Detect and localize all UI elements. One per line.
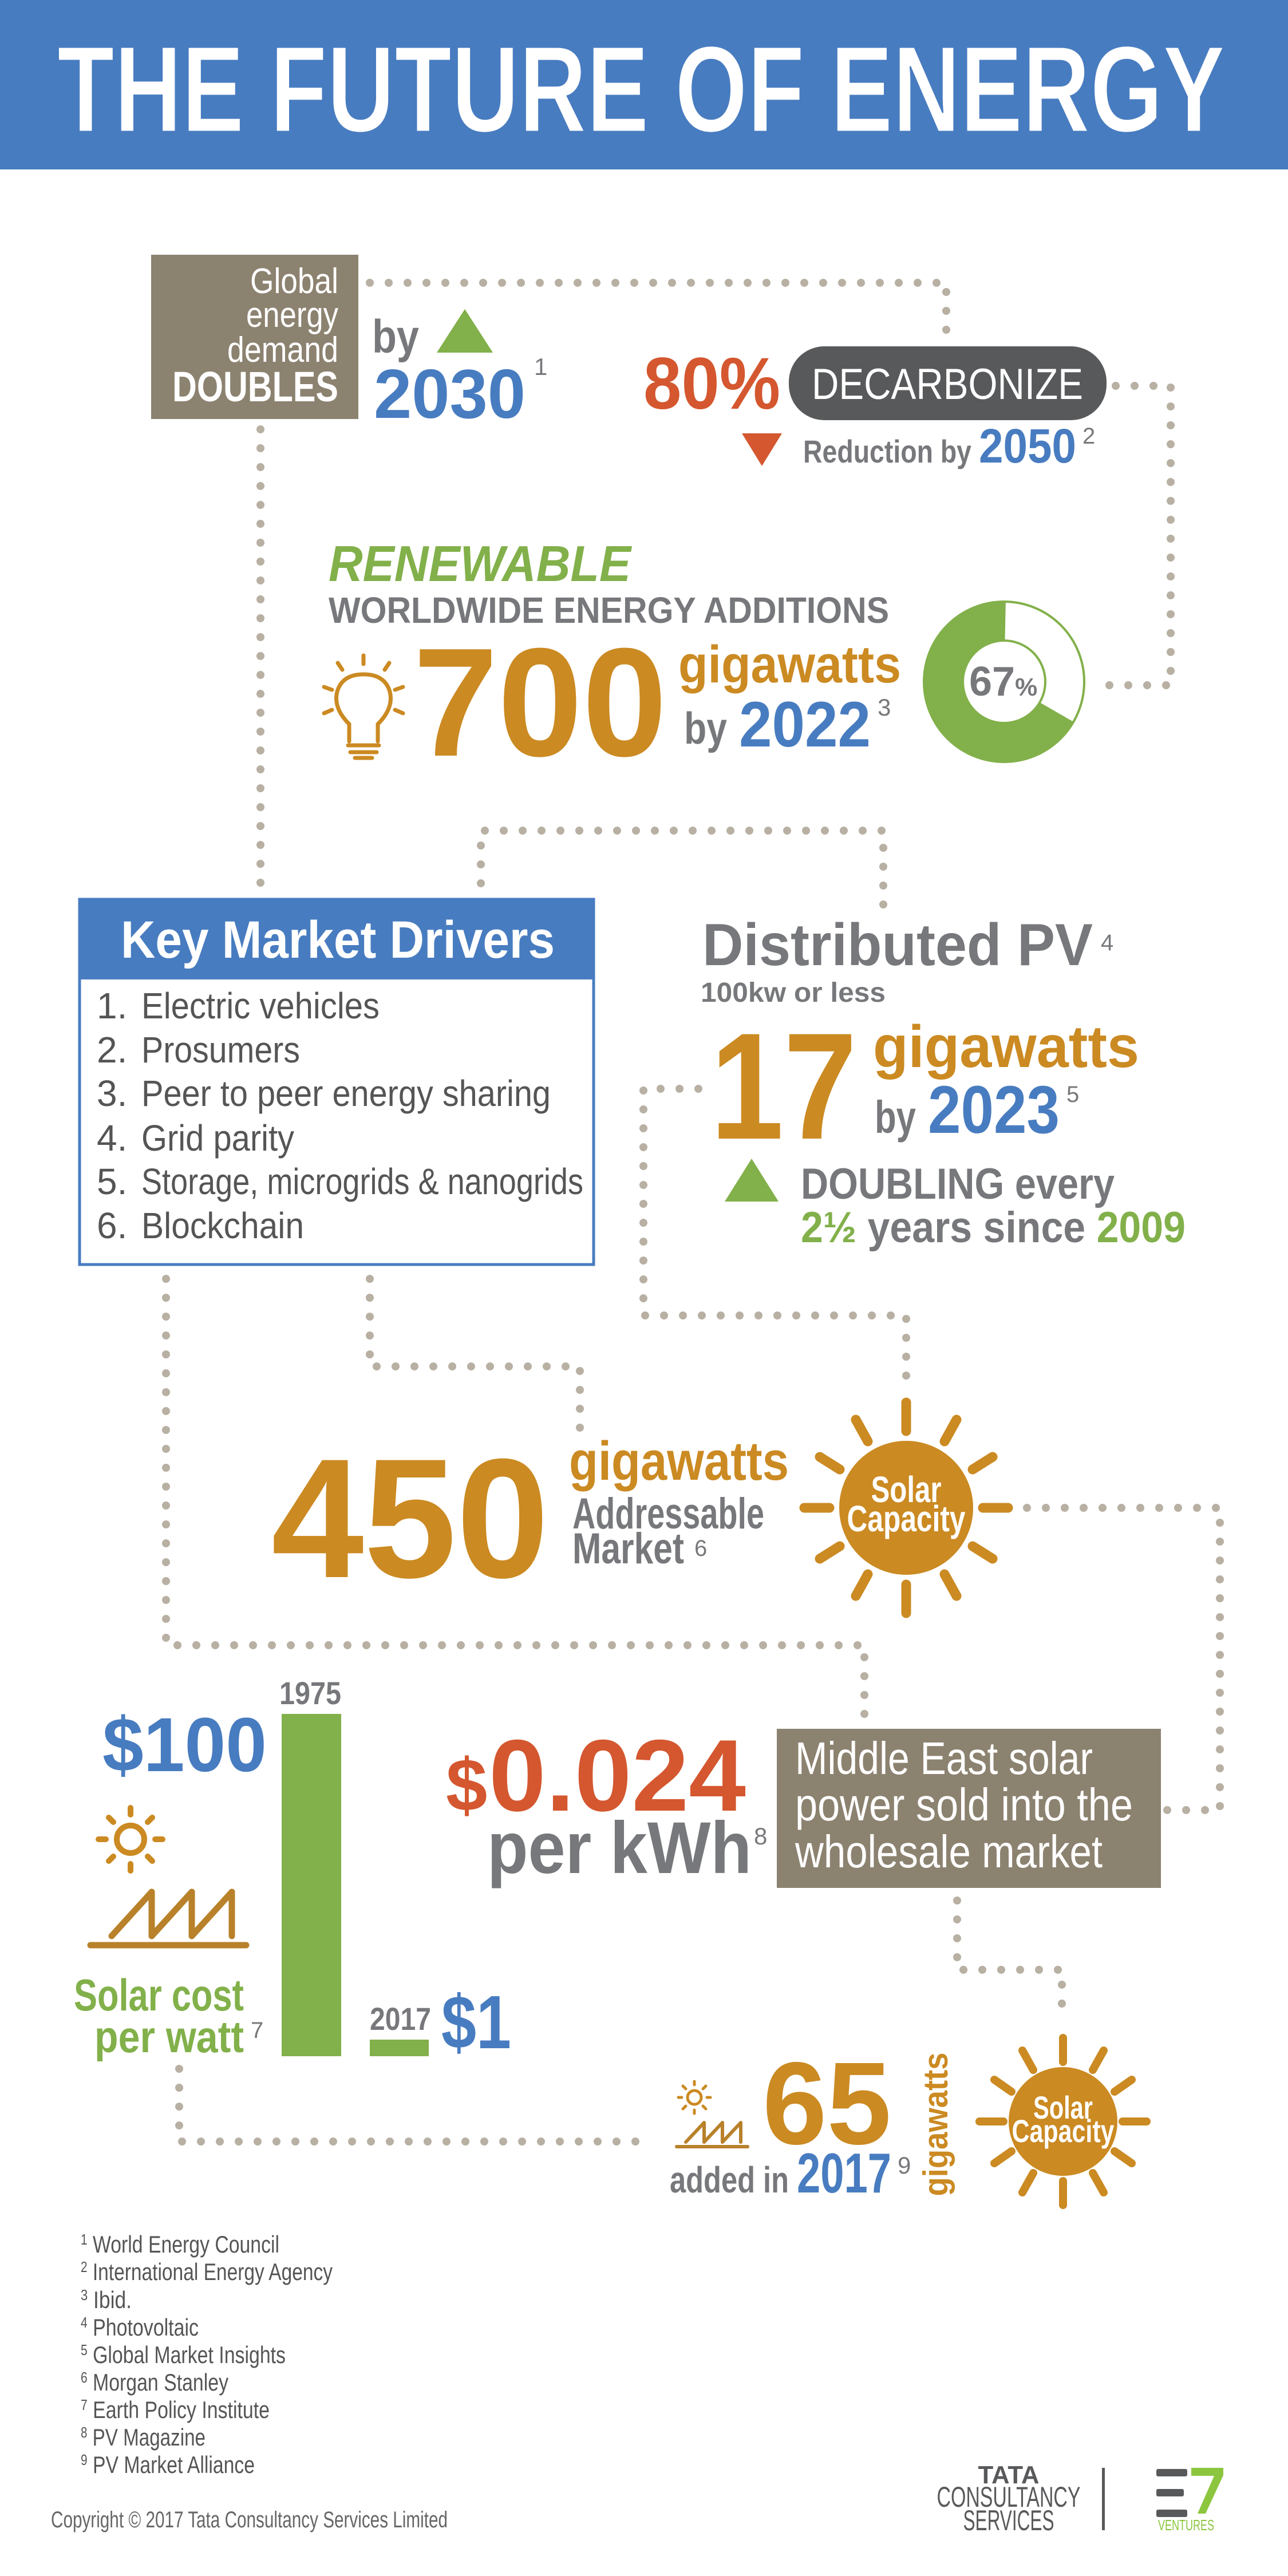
stat: distributed PV: 4 <box>1101 930 1113 955</box>
stat: decarbonize <box>643 343 1107 473</box>
stat: by 2030 <box>372 309 547 433</box>
panel: global energy demand: Global <box>250 262 338 301</box>
dotted connectors <box>166 283 1220 2142</box>
stat: distributed PV: Distributed PV <box>702 912 1093 978</box>
panel: key market drivers: Storage, microgrids & nanogrids <box>141 1161 583 1202</box>
footnotes: 7 <box>81 2396 88 2413</box>
chart: solar cost per watt bars: per watt <box>94 2012 244 2062</box>
logo: TCS <box>937 2461 1105 2537</box>
panel: key market drivers <box>80 899 594 1265</box>
panel: global energy demand <box>151 255 358 419</box>
panel: key market drivers: 5. <box>97 1161 127 1202</box>
panel: key market drivers: Peer to peer energy sharing <box>141 1073 551 1114</box>
stat: $0.024 per kWh: 0.024 <box>489 1718 746 1832</box>
chart: 67% donut <box>921 599 1087 765</box>
stat: decarbonize: 80% <box>643 343 780 425</box>
footnotes: Morgan Stanley <box>88 2369 228 2396</box>
stat: 450 gigawatts <box>271 1423 789 1613</box>
icon: sun solar capacity 1: Capacity <box>847 1498 966 1539</box>
footnotes: Ibid. <box>88 2286 132 2313</box>
stat: distributed PV: 2023 <box>928 1072 1060 1148</box>
stat: distributed PV: 100kw or less <box>701 978 886 1008</box>
stat: distributed PV: 5 <box>1066 1082 1079 1107</box>
footnotes: PV Magazine <box>87 2424 206 2451</box>
logo: E7 ventures: VENTURES <box>1158 2516 1214 2534</box>
logo: E7 ventures <box>1156 2468 1223 2534</box>
stat: distributed PV: gigawatts <box>873 1014 1139 1080</box>
chart: solar cost per watt bars: 1975 <box>279 1675 341 1711</box>
chart: solar cost per watt bars: 7 <box>251 2018 263 2043</box>
footnotes: 9 <box>81 2451 88 2468</box>
icon: small sun 2 <box>678 2081 710 2113</box>
icon: sun solar capacity 1 <box>804 1402 1008 1613</box>
chart: solar cost per watt bars: $100 <box>102 1702 267 1788</box>
stat: 450 gigawatts: Market <box>572 1524 684 1573</box>
footnotes: 1 <box>81 2231 88 2248</box>
panel: key market drivers: Prosumers <box>141 1029 300 1070</box>
chart: solar cost per watt bars <box>74 1675 511 2064</box>
callout: middle east: power sold into the <box>795 1779 1133 1830</box>
stat: 65 gigawatts: 9 <box>898 2152 911 2179</box>
panel: key market drivers: Grid parity <box>141 1117 294 1159</box>
footnotes: 2 <box>81 2258 88 2275</box>
chart: 67% donut: 67% <box>969 659 1037 705</box>
stat: $0.024 per kWh <box>446 1718 767 1889</box>
panel: global energy demand: demand <box>227 330 338 370</box>
footnotes: PV Market Alliance <box>88 2451 255 2478</box>
icon: sun solar capacity 2: Capacity <box>1012 2113 1114 2149</box>
stat: 450 gigawatts: 6 <box>694 1536 707 1561</box>
stat: 700 gigawatts: by <box>684 703 727 753</box>
panel: key market drivers: 6. <box>97 1205 127 1246</box>
stat: by 2030: 2030 <box>374 355 526 433</box>
footnotes: Photovoltaic <box>88 2314 199 2341</box>
chart: solar cost per watt bars: Solar cost <box>74 1970 244 2020</box>
stat: 65 gigawatts <box>670 2038 955 2204</box>
stat: 450 gigawatts: 450 <box>271 1423 549 1613</box>
logo: TCS: SERVICES <box>963 2504 1054 2537</box>
stat: 65 gigawatts: 65 <box>762 2038 891 2169</box>
stat: distributed PV: 2½ years since 2009 <box>801 1203 1186 1252</box>
stat: $0.024 per kWh: 8 <box>754 1823 767 1850</box>
icon: small solar panels <box>677 2123 748 2147</box>
stat: distributed PV: 17 <box>710 1002 857 1171</box>
renewable heading <box>329 535 889 631</box>
stat: 65 gigawatts: gigawatts <box>916 2053 955 2196</box>
stat: decarbonize: 2050 <box>979 419 1076 473</box>
stat: distributed PV: by <box>875 1092 916 1143</box>
icon: light bulb <box>324 655 403 758</box>
panel: key market drivers: 3. <box>97 1073 127 1114</box>
stat: 450 gigawatts: gigawatts <box>569 1431 789 1492</box>
renewable heading: WORLDWIDE ENERGY ADDITIONS <box>329 590 889 631</box>
chart: solar cost per watt bars: 2017 <box>370 2001 431 2037</box>
panel: key market drivers: Electric vehicles <box>141 985 380 1026</box>
panel: key market drivers: Blockchain <box>141 1205 304 1246</box>
panel: key market drivers: Key Market Drivers <box>121 911 555 969</box>
stat: 65 gigawatts: added in <box>670 2159 789 2200</box>
stat: by 2030: by <box>372 311 419 363</box>
icon: small sun <box>98 1808 163 1871</box>
icon: sun solar capacity 2: Solar <box>1033 2089 1093 2125</box>
stat: 65 gigawatts: 2017 <box>797 2142 891 2204</box>
callout: middle east: Middle East solar <box>795 1733 1093 1784</box>
stat: $0.024 per kWh: $ <box>446 1743 487 1827</box>
stat: 700 gigawatts <box>413 617 901 789</box>
renewable heading: RENEWABLE <box>329 535 632 592</box>
stat: 700 gigawatts: 2022 <box>739 689 871 760</box>
stat: distributed PV <box>701 912 1186 1252</box>
chart: solar cost per watt bars: $1 <box>441 1980 511 2064</box>
icon: sun solar capacity 1: Solar <box>871 1469 941 1510</box>
footnotes: Global Market Insights <box>88 2341 286 2368</box>
footnotes: 4 <box>81 2314 88 2331</box>
stat: 700 gigawatts: gigawatts <box>678 635 901 694</box>
panel: global energy demand: energy <box>246 295 338 335</box>
stat: decarbonize: DECARBONIZE <box>812 360 1083 409</box>
stat: 700 gigawatts: 700 <box>413 617 667 789</box>
stat: distributed PV: DOUBLING every <box>801 1160 1115 1208</box>
callout: middle east <box>777 1729 1161 1888</box>
footnotes: 6 <box>81 2369 88 2386</box>
stat: decarbonize: Reduction by <box>803 433 971 469</box>
footnotes: World Energy Council <box>88 2231 279 2258</box>
icon: solar panels <box>90 1892 246 1945</box>
stat: $0.024 per kWh: per kWh <box>487 1807 752 1889</box>
footnotes: 5 <box>81 2341 88 2358</box>
panel: global energy demand: DOUBLES <box>172 363 338 410</box>
stat: 700 gigawatts: 3 <box>878 694 891 721</box>
icon: sun solar capacity 2 <box>979 2038 1147 2205</box>
footnotes <box>81 2231 333 2478</box>
header band <box>0 0 1288 169</box>
footnotes: 8 <box>81 2424 87 2441</box>
panel: key market drivers: 1. <box>97 985 127 1026</box>
panel: key market drivers: 2. <box>97 1029 127 1070</box>
callout: middle east: wholesale market <box>795 1826 1103 1877</box>
logo: TCS: TATA <box>978 2461 1040 2489</box>
footnotes: 3 <box>81 2286 88 2304</box>
footnotes: International Energy Agency <box>88 2258 333 2285</box>
footnotes: Earth Policy Institute <box>88 2396 270 2423</box>
logo: TCS: CONSULTANCY <box>937 2481 1081 2513</box>
panel: key market drivers: 4. <box>97 1117 127 1159</box>
stat: by 2030: 1 <box>534 353 547 380</box>
copyright: Copyright © 2017 Tata Consultancy Services Limited <box>51 2507 448 2532</box>
stat: 450 gigawatts: Addressable <box>572 1490 764 1538</box>
stat: decarbonize: 2 <box>1082 424 1095 449</box>
